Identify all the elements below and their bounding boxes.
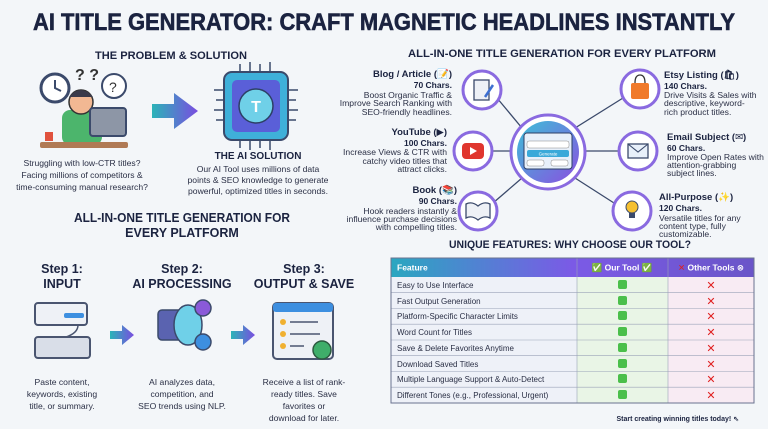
comparison table: ✕ — [706, 374, 716, 386]
comparison table: ✕ — [706, 296, 716, 308]
comparison table: ✕ — [706, 280, 716, 292]
platform: youtube — [343, 127, 492, 174]
step 1: keywords, existing — [27, 389, 97, 399]
platform: blog — [340, 68, 501, 117]
platform: email: attention-grabbing — [667, 160, 736, 170]
platform: all-purpose: Versatile titles for any — [659, 213, 741, 223]
platform: all-purpose: content type, fully — [659, 221, 727, 231]
platform: etsy: 140 Chars. — [664, 81, 707, 91]
platform: youtube: Increase Views & CTR with — [343, 147, 447, 157]
comparison table: Feature — [397, 262, 428, 272]
platform: all-purpose: All-Purpose (✨) — [659, 191, 733, 203]
platform: all-purpose: customizable. — [659, 229, 712, 239]
step 2: AI analyzes data, — [149, 377, 215, 387]
text: problem description: Facing millions of competitors & — [21, 170, 143, 180]
arrow: step 2 to 3 — [231, 325, 255, 345]
heading: all-in-one (right): ALL-IN-ONE TITLE GENERATION FOR EVERY PLATFORM — [408, 48, 716, 60]
comparison table: Multiple Language Support & Auto-Detect — [397, 375, 545, 384]
comparison table: Download Saved Titles — [397, 360, 478, 369]
step 3: OUTPUT & SAVE — [254, 277, 354, 291]
text: AI solution: Our AI Tool uses millions of data — [197, 164, 320, 174]
step 3: favorites or — [283, 401, 325, 411]
platform: book: Book (📚) — [412, 184, 457, 196]
step 2: AI PROCESSING — [132, 277, 232, 291]
platform: blog: Blog / Article (📝) — [373, 68, 452, 80]
platform: book — [347, 184, 497, 232]
platform: email: Email Subject (✉) — [667, 132, 746, 143]
comparison table: Different Tones (e.g., Professional, Urgent) — [397, 391, 549, 400]
platform: etsy: rich product titles. — [664, 107, 731, 117]
platform: email: subject lines. — [667, 168, 717, 178]
platform: blog: 70 Chars. — [414, 80, 452, 90]
comparison table: Platform-Specific Character Limits — [397, 312, 518, 321]
platform: book: 90 Chars. — [419, 196, 457, 206]
platform: all-purpose: 120 Chars. — [659, 203, 702, 213]
platform: youtube: catchy video titles that — [362, 156, 448, 166]
text: problem description: time-consuming manual research? — [16, 182, 148, 192]
icon: AI chip brain: T — [251, 99, 261, 116]
comparison table — [391, 258, 754, 403]
center: generator UI — [511, 115, 585, 189]
text: AI solution: THE AI SOLUTION — [215, 151, 301, 162]
comparison table: ✕ — [706, 390, 716, 402]
step 2: competition, and — [150, 389, 214, 399]
step 2: Step 2: — [161, 262, 203, 276]
comparison table: Word Count for Titles — [397, 328, 472, 337]
step 3 — [254, 262, 354, 423]
comparison table: ✕ — [706, 359, 716, 371]
platform: book: influence purchase decisions — [347, 214, 457, 224]
center: generator UI: Generate — [539, 152, 558, 156]
platform: youtube: 100 Chars. — [404, 138, 447, 148]
platform: blog: SEO-friendly headlines. — [362, 107, 452, 117]
platform: youtube: YouTube (▶) — [392, 127, 447, 138]
comparison table: ✅ Our Tool ✅ — [592, 262, 653, 272]
icon: stressed person at desk: ? ? — [75, 67, 99, 84]
connector lines — [493, 98, 623, 203]
text: problem description: Struggling with low-CTR titles? — [23, 158, 141, 168]
platform: book: with compelling titles. — [375, 222, 457, 232]
step 2 — [132, 262, 232, 411]
platform: email: Improve Open Rates with — [667, 152, 764, 162]
step 1 — [27, 262, 97, 411]
platform: youtube: attract clicks. — [397, 164, 447, 174]
platform: email: 60 Chars. — [667, 143, 705, 153]
comparison table: ✕ — [706, 311, 716, 323]
comparison table: Fast Output Generation — [397, 297, 481, 306]
step 3: Step 3: — [283, 262, 325, 276]
icon: stressed person at desk — [40, 67, 128, 148]
heading: all-in-one (left) — [74, 211, 290, 240]
footer call to action: Start creating winning titles today! ⇖ — [616, 416, 739, 423]
heading: all-in-one (left): EVERY PLATFORM — [125, 226, 239, 240]
comparison table: ✕ — [706, 327, 716, 339]
platform: etsy: descriptive, keyword- — [664, 98, 745, 108]
text: AI solution — [188, 151, 329, 196]
arrow: step 1 to 2 — [110, 325, 134, 345]
step 1: INPUT — [43, 277, 81, 291]
platform: all-purpose — [613, 191, 741, 239]
text: AI solution: points & SEO knowledge to generate — [188, 175, 329, 185]
step 3: download for later. — [269, 413, 339, 423]
heading: problem & solution: THE PROBLEM & SOLUTION — [95, 50, 247, 62]
step 1: Paste content, — [35, 377, 89, 387]
step 3: Receive a list of rank- — [263, 377, 345, 387]
icon: stressed person at desk: ? — [109, 79, 117, 95]
comparison table: ✕ Other Tools ⊗ — [678, 262, 744, 272]
platform: etsy: Etsy Listing (🛍) — [664, 69, 739, 81]
comparison table: Easy to Use Interface — [397, 281, 474, 290]
platform: blog: Improve Search Ranking with — [340, 98, 452, 108]
comparison table: ✕ — [706, 343, 716, 355]
step 3: ready titles. Save — [271, 389, 337, 399]
heading: unique features: UNIQUE FEATURES: WHY CHOOSE OUR TOOL? — [449, 239, 691, 251]
comparison table: Save & Delete Favorites Anytime — [397, 344, 514, 353]
text: problem description — [16, 158, 148, 192]
heading: all-in-one (left): ALL-IN-ONE TITLE GENERATION FOR — [74, 211, 290, 225]
platform: blog: Boost Organic Traffic & — [364, 90, 452, 100]
arrow: problem to solution — [152, 93, 198, 129]
platform: book: Hook readers instantly & — [363, 206, 457, 216]
step 1: title, or summary. — [29, 401, 95, 411]
step 2: SEO trends using NLP. — [138, 401, 226, 411]
platform: email — [619, 132, 764, 178]
text: AI solution: powerful, optimized titles in seconds. — [188, 186, 328, 196]
step 1: Step 1: — [41, 262, 83, 276]
platform: etsy — [621, 69, 757, 117]
platform: etsy: Drive Visits & Sales with — [664, 90, 757, 100]
icon: AI chip brain — [214, 62, 298, 150]
